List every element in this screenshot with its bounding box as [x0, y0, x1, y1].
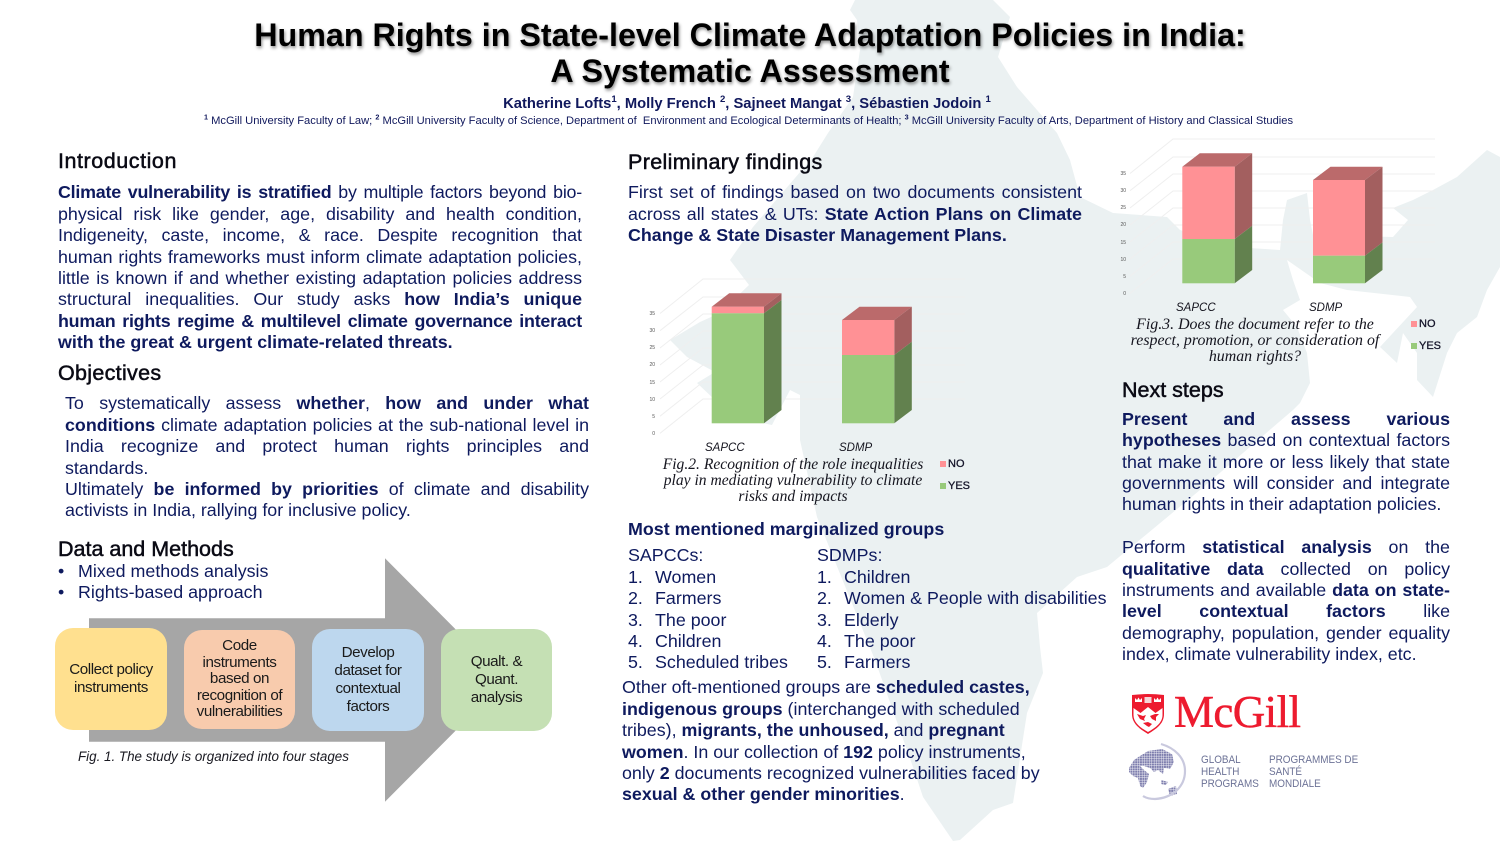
- text: preliminary findings: Change & State Disaster Management Plans.: [628, 225, 1007, 245]
- stage 4: [441, 629, 552, 731]
- text: english: HEALTH: [1201, 766, 1239, 778]
- text: other groups: only 2 documents recognized vulnerabilities faced by: [622, 763, 1040, 783]
- list: SDMPs: 5.: [817, 652, 832, 672]
- logo: global health programs: [1129, 743, 1358, 800]
- stage 4: Qualt. &: [471, 653, 522, 670]
- icon: dotted globe: [1129, 743, 1186, 800]
- legend: figure 2: [940, 458, 970, 492]
- list: SDMPs: 3.: [817, 610, 832, 630]
- chart: figure 2: 25: [649, 345, 655, 351]
- text: introduction: little is known if and whether existing adaptation policies address: [58, 268, 582, 288]
- chart: figure 2: 10: [649, 397, 655, 403]
- text: preliminary findings: First set of findings based on two documents consistent: [628, 182, 1082, 202]
- chart labels: figure 3: SDMP: [1309, 302, 1342, 314]
- text: next steps: instruments and available data on state-: [1122, 580, 1450, 600]
- caption: figure 2: risks and impacts: [738, 488, 848, 505]
- list: SAPCCs: 3.: [628, 610, 643, 630]
- list: SDMPs: The poor: [844, 631, 915, 651]
- text: next steps: Perform statistical analysis on the: [1122, 537, 1450, 557]
- heading: most mentioned marginalized groups: Most mentioned marginalized groups: [628, 519, 944, 539]
- text: objectives: activists in India, rallying for inclusive policy.: [65, 500, 411, 520]
- bar: SDMP: [1313, 167, 1382, 283]
- chart: figure 3: 30: [1120, 188, 1126, 194]
- text: introduction: with the great & urgent climate-related threats.: [58, 332, 453, 352]
- caption: figure 2: [662, 456, 923, 505]
- text: introduction: human rights frameworks must inform climate adaptation policies,: [58, 247, 582, 267]
- list: SDMPs: 4.: [817, 631, 832, 651]
- stage 4: Quant.: [475, 671, 518, 688]
- caption: figure 3: human rights?: [1209, 348, 1301, 365]
- list: SDMPs: [817, 545, 1106, 672]
- text: next steps: [1122, 409, 1450, 664]
- legend: figure 3: NO: [1419, 318, 1436, 330]
- bar: SAPCC: [712, 293, 782, 423]
- chart: figure 2: 30: [649, 328, 655, 334]
- chart: figure 3: 0: [1123, 291, 1126, 297]
- chart: figure 2: 20: [649, 362, 655, 368]
- arrow: [89, 558, 456, 802]
- text: next steps: governments will consider and integrate: [1122, 473, 1450, 493]
- text: other groups: sexual & other gender minorities.: [622, 784, 905, 804]
- heading: data and methods: Data and Methods: [58, 537, 234, 561]
- chart: figure 3: 25: [1120, 205, 1126, 211]
- text: english: [1201, 754, 1259, 790]
- flow diagram: four stages: [55, 558, 552, 802]
- text: other groups: indigenous groups (interchanged with scheduled: [622, 699, 1020, 719]
- list: SAPCCs: 2.: [628, 588, 643, 608]
- title: Human Rights in State-level Climate Adaptation Policies in India:: [254, 17, 1246, 53]
- wordmark: McGill: [1174, 687, 1300, 737]
- list: SAPCCs: Farmers: [655, 588, 721, 608]
- authors: Katherine Lofts1, Molly French 2, Sajneet Mangat 3, Sébastien Jodoin 1: [503, 94, 991, 112]
- stage 2: vulnerabilities: [197, 703, 282, 720]
- chart labels: figure 3: SAPCC: [1176, 302, 1216, 314]
- text: introduction: physical risk like gender, age, disability and health condition,: [58, 204, 582, 224]
- stage 1: instruments: [74, 679, 148, 696]
- list: SAPCCs: The poor: [655, 610, 726, 630]
- text: introduction: Indigeneity, caste, income, & race. Despite recognition that: [58, 225, 582, 245]
- list: SDMPs: Women & People with disabilities: [844, 588, 1106, 608]
- text: french: SANTÉ: [1269, 766, 1302, 778]
- bar: SAPCC: [1182, 153, 1252, 283]
- list: methods: Mixed methods analysis: [78, 561, 268, 581]
- chart: figure 3: 15: [1120, 240, 1126, 246]
- text: preliminary findings: [628, 182, 1082, 245]
- list: SAPCCs: 5.: [628, 652, 643, 672]
- text: next steps: level contextual factors like: [1122, 601, 1450, 621]
- list: SAPCCs: Women: [655, 567, 716, 587]
- chart: figure 3: 20: [1120, 222, 1126, 228]
- title: [254, 17, 1246, 92]
- chart: figure 3: [1120, 138, 1435, 297]
- list: SAPCCs: [628, 545, 788, 672]
- stage 3: factors: [347, 698, 389, 715]
- list: SAPCCs: Children: [655, 631, 721, 651]
- list: SDMPs: SDMPs:: [817, 545, 882, 565]
- list: SAPCCs: 1.: [628, 567, 643, 587]
- list: SAPCCs: 4.: [628, 631, 643, 651]
- heading: introduction: Introduction: [58, 149, 177, 173]
- text: french: [1269, 754, 1358, 790]
- list: SDMPs: Elderly: [844, 610, 899, 630]
- chart: figure 2: 5: [652, 414, 655, 420]
- text: other groups: tribes), migrants, the unhoused, and pregnant: [622, 720, 1005, 740]
- heading: preliminary findings: Preliminary findings: [628, 150, 823, 174]
- stage 3: Develop: [342, 644, 394, 661]
- caption: figure 3: Fig.3. Does the document refer to the: [1136, 316, 1374, 333]
- text: objectives: standards.: [65, 458, 148, 478]
- caption: figure 1: Fig. 1. The study is organized into four stages: [78, 749, 349, 764]
- stage 2: instruments: [203, 654, 276, 671]
- list: SDMPs: Farmers: [844, 652, 910, 672]
- text: next steps: qualitative data collected on policy: [1122, 559, 1450, 579]
- caption: figure 3: respect, promotion, or consideration of: [1131, 332, 1379, 349]
- stage 3: [312, 629, 424, 731]
- legend: figure 2: NO: [948, 458, 964, 470]
- icon: McGill shield: [1132, 694, 1164, 734]
- text: next steps: human rights in their adaptation policies.: [1122, 494, 1441, 514]
- text: next steps: that make it more or less likely that state: [1122, 452, 1450, 472]
- caption: figure 2: Fig.2. Recognition of the role inequalities: [663, 456, 923, 473]
- chart labels: figure 2: SAPCC: [705, 442, 745, 454]
- legend: figure 3: [1411, 318, 1441, 352]
- text: introduction: Climate vulnerability is stratified by multiple factors beyond bio-: [58, 182, 582, 202]
- chart: figure 3: 5: [1123, 274, 1126, 280]
- text: other groups: [622, 677, 1040, 804]
- text: french: MONDIALE: [1269, 778, 1321, 790]
- text: preliminary findings: across all states & UTs: State Action Plans on Climate: [628, 204, 1082, 224]
- text: objectives: Ultimately be informed by priorities of climate and disability: [65, 479, 589, 499]
- chart labels: figure 2: [705, 442, 872, 454]
- list: SAPCCs: SAPCCs:: [628, 545, 703, 565]
- text: introduction: structural inequalities. Our study asks how India’s unique: [58, 289, 582, 309]
- list: SAPCCs: Scheduled tribes: [655, 652, 788, 672]
- caption: figure 3: [1131, 316, 1382, 365]
- affiliations: 1 McGill University Faculty of Law; 2 McGill University Faculty of Science, Department of Environment and Ecological Determinants of Health; 3 McGill University Faculty of Arts, Department of History and Classical Studies: [204, 112, 1293, 127]
- list: SDMPs: Children: [844, 567, 910, 587]
- list: SDMPs: 1.: [817, 567, 832, 587]
- list: SDMPs: 2.: [817, 588, 832, 608]
- text: objectives: India recognize and protect human rights principles and: [65, 436, 589, 456]
- text: next steps: Present and assess various: [1122, 409, 1450, 429]
- stage 2: Code: [222, 637, 257, 654]
- text: next steps: demography, population, gender equality: [1122, 623, 1450, 643]
- chart labels: figure 3: [1176, 302, 1342, 314]
- stage 3: dataset for: [334, 662, 402, 679]
- text: english: PROGRAMS: [1201, 778, 1259, 790]
- list: methods: •: [58, 561, 64, 581]
- chart: figure 2: 15: [649, 380, 655, 386]
- logo: McGill: [1132, 687, 1300, 737]
- text: objectives: [65, 393, 589, 520]
- list: methods: Rights-based approach: [78, 582, 263, 602]
- text: introduction: [58, 182, 582, 352]
- stage 2: based on: [210, 670, 269, 687]
- stage 2: [184, 630, 295, 729]
- stage 3: contextual: [335, 680, 401, 697]
- text: next steps: hypotheses based on contextual factors: [1122, 430, 1450, 450]
- chart: figure 2: [649, 278, 912, 437]
- text: english: GLOBAL: [1201, 754, 1241, 766]
- chart labels: figure 2: SDMP: [839, 442, 872, 454]
- chart: figure 2: 35: [649, 311, 655, 317]
- text: introduction: human rights regime & multilevel climate governance interact: [58, 311, 582, 331]
- stage 1: [55, 628, 167, 730]
- bar: SDMP: [842, 307, 912, 423]
- legend: figure 2: YES: [948, 480, 970, 492]
- text: french: PROGRAMMES DE: [1269, 754, 1358, 766]
- list: methods: [58, 561, 268, 602]
- stage 1: Collect policy: [69, 661, 153, 678]
- chart: figure 3: 10: [1120, 257, 1126, 263]
- chart: figure 2: 0: [652, 431, 655, 437]
- caption: figure 2: play in mediating vulnerability to climate: [664, 472, 922, 489]
- text: next steps: index, climate vulnerability index, etc.: [1122, 644, 1417, 664]
- text: other groups: Other oft-mentioned groups are scheduled castes,: [622, 677, 1030, 697]
- heading: objectives: Objectives: [58, 361, 161, 385]
- text: objectives: To systematically assess whether, how and under what: [65, 393, 589, 413]
- text: other groups: women. In our collection of 192 policy instruments,: [622, 742, 1026, 762]
- stage 4: analysis: [471, 689, 522, 706]
- stage 2: recognition of: [197, 687, 282, 704]
- chart: figure 3: 35: [1120, 171, 1126, 177]
- legend: figure 3: YES: [1419, 340, 1441, 352]
- text: objectives: conditions climate adaptation policies at the sub-national level in: [65, 415, 589, 435]
- title: A Systematic Assessment: [550, 53, 950, 89]
- list: methods: •: [58, 582, 64, 602]
- heading: next steps: Next steps: [1122, 378, 1224, 402]
